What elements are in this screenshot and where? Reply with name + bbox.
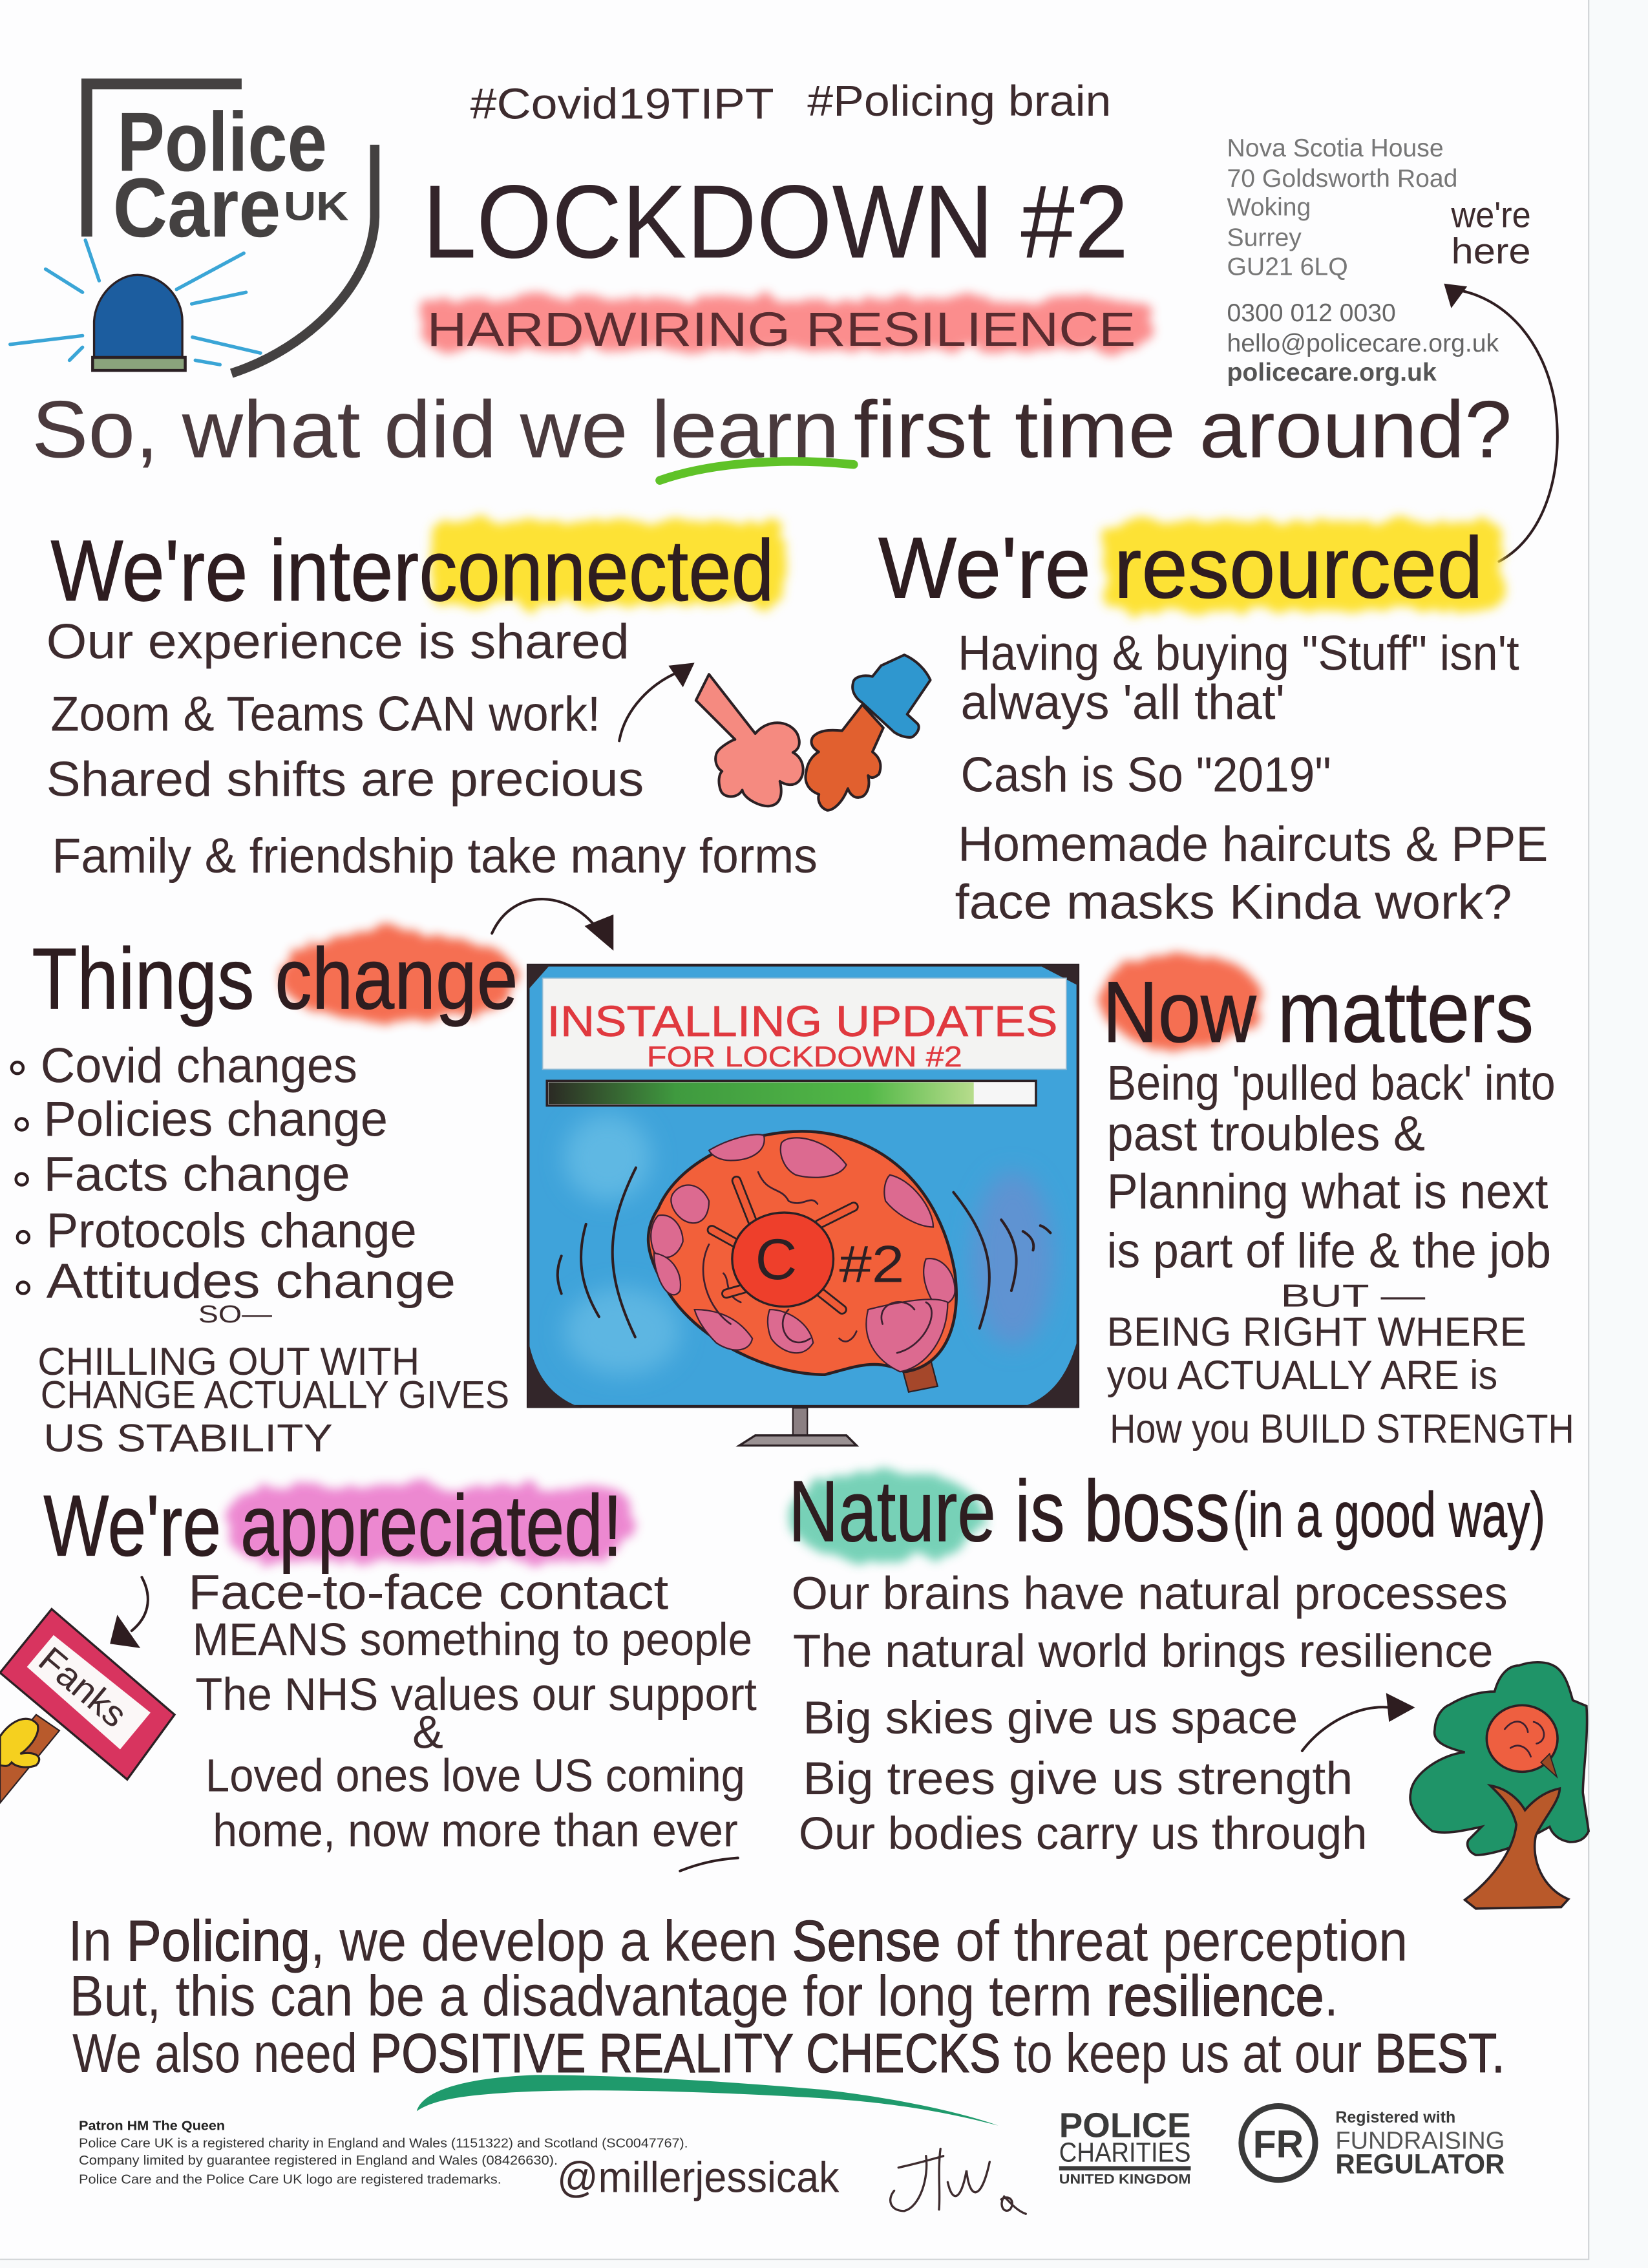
- footer legal text: [79, 2119, 688, 2187]
- panel: things change: Things change: [32, 930, 518, 1027]
- logo: Fundraising Regulator: [1241, 2106, 1505, 2180]
- callout: we're here with arrow: [1444, 194, 1558, 562]
- contact address: hello@policecare.org.uk: [1227, 330, 1499, 357]
- panel: now matters: Being 'pulled back' into: [1107, 1055, 1556, 1110]
- contact address: Woking: [1227, 194, 1311, 222]
- contact address: [1227, 134, 1499, 387]
- panel: things change: Attitudes change: [47, 1254, 456, 1309]
- monitor illustration: [528, 965, 1078, 1446]
- panel: nature is boss: [787, 1463, 1545, 1860]
- panel: now matters: past troubles &: [1107, 1107, 1425, 1161]
- panel: now matters: Now matters: [1103, 964, 1534, 1061]
- hashtags: [470, 77, 1111, 129]
- contact address: policecare.org.uk: [1227, 359, 1437, 387]
- panel: we're interconnected: [47, 521, 818, 884]
- logo: Fundraising Regulator: REGULATOR: [1335, 2149, 1505, 2180]
- logo: Fundraising Regulator: FUNDRAISING: [1335, 2128, 1505, 2155]
- hashtags: #Covid19TIPT: [470, 80, 774, 129]
- closing statement: We also need POSITIVE REALITY CHECKS to keep us at our BEST.: [72, 2023, 1505, 2084]
- panel: we're resourced: face masks Kinda work?: [955, 875, 1512, 930]
- title: LOCKDOWN #2: [423, 164, 1128, 280]
- update message panel: FOR LOCKDOWN #2: [647, 1041, 962, 1073]
- update message panel: [543, 978, 1066, 1073]
- logo: Police Charities: UNITED KINGDOM: [1059, 2171, 1191, 2187]
- panel: we're resourced: always 'all that': [961, 675, 1285, 730]
- closing statement: In Policing, we develop a keen Sense of threat perception: [68, 1908, 1408, 1973]
- contact address: Surrey: [1227, 224, 1302, 252]
- main question: [32, 384, 1512, 480]
- icon: tree with brain: [1410, 1662, 1589, 1909]
- panel: nature is boss: Our brains have natural processes: [792, 1567, 1508, 1619]
- panel: now matters: you ACTUALLY ARE is: [1107, 1353, 1497, 1398]
- panel: things change: CHANGE ACTUALLY GIVES: [41, 1372, 509, 1416]
- logo: Fundraising Regulator: Registered with: [1335, 2109, 1455, 2126]
- contact address: GU21 6LQ: [1227, 253, 1348, 281]
- logo: Fundraising Regulator: FR: [1253, 2122, 1304, 2166]
- logo: Police Care UK shield: UK: [284, 184, 349, 229]
- panel: we're interconnected: Family & friendship take many forms: [52, 829, 818, 884]
- panel: things change: CHILLING OUT WITH: [37, 1339, 419, 1383]
- panel: things change: Covid changes: [41, 1039, 357, 1094]
- signature: [891, 2149, 1026, 2214]
- progress bar: [547, 1081, 1036, 1105]
- panel: we're interconnected: We're interconnected: [50, 522, 774, 619]
- panel: now matters: How you BUILD STRENGTH: [1110, 1406, 1574, 1452]
- panel: now matters: is part of life & the job: [1107, 1224, 1551, 1278]
- panel: things change: [12, 929, 518, 1459]
- panel: things change: US STABILITY: [43, 1415, 333, 1459]
- logo: Police Charities: CHARITIES: [1059, 2137, 1191, 2168]
- panel: things change: Protocols change: [47, 1203, 417, 1258]
- logo: Police Care UK shield: Care: [113, 160, 280, 255]
- panel: we're appreciated: Face-to-face contact: [188, 1565, 668, 1620]
- brain with virus: [648, 1131, 956, 1392]
- footer legal text: Company limited by guarantee registered in England and Wales (08426630).: [79, 2154, 558, 2168]
- closing statement: [68, 1908, 1505, 2126]
- panel: we're appreciated: MEANS something to people: [193, 1614, 752, 1666]
- panel: we're appreciated: Loved ones love US coming: [206, 1750, 745, 1802]
- panel: we're appreciated: home, now more than ever: [213, 1805, 738, 1857]
- monitor screen: [528, 965, 1078, 1408]
- logo: Police Care UK shield: Police: [117, 94, 327, 189]
- panel: we're appreciated: [43, 1478, 757, 1871]
- logo: Police Charities: POLICE: [1059, 2106, 1191, 2145]
- panel: we're appreciated: We're appreciated!: [43, 1478, 622, 1574]
- panel: we're resourced: [878, 520, 1548, 930]
- author handle: @millerjessicak: [557, 2154, 840, 2202]
- panel: we're appreciated: &: [412, 1706, 443, 1758]
- main question: first time around?: [854, 384, 1512, 474]
- contact address: 70 Goldsworth Road: [1227, 165, 1457, 193]
- panel: now matters: BEING RIGHT WHERE: [1107, 1309, 1527, 1355]
- contact address: 0300 012 0030: [1227, 299, 1396, 327]
- panel: we're resourced: We're resourced: [878, 520, 1483, 617]
- hashtags: #Policing brain: [807, 77, 1111, 125]
- panel: now matters: Planning what is next: [1107, 1164, 1548, 1219]
- panel: we're appreciated: The NHS values our support: [195, 1669, 757, 1721]
- panel: now matters: BUT —: [1280, 1278, 1426, 1314]
- callout: we're here with arrow: here: [1451, 230, 1531, 271]
- panel: nature is boss: Our bodies carry us through: [799, 1808, 1368, 1860]
- panel: we're resourced: Homemade haircuts & PPE: [958, 817, 1548, 872]
- arrow to tree: [1302, 1693, 1415, 1751]
- monitor stand: [739, 1408, 856, 1446]
- closing statement: But, this can be a disadvantage for long term resilience.: [69, 1964, 1338, 2028]
- panel: nature is boss: Nature is boss: [788, 1463, 1230, 1560]
- arrow to hands: [619, 662, 695, 741]
- vibration lines: [558, 1168, 1050, 1337]
- subtitle with red highlight: HARDWIRING RESILIENCE: [427, 302, 1136, 356]
- icon: Fanks sign with hand: [0, 1577, 174, 1803]
- panel: we're resourced: Cash is So "2019": [961, 748, 1331, 803]
- icon: blue police siren: [10, 240, 260, 370]
- logo: Police Charities: [1059, 2106, 1191, 2187]
- logo: Police Care UK shield: [87, 84, 375, 374]
- arrow to sign: [110, 1577, 148, 1648]
- footer legal text: Police Care UK is a registered charity in England and Wales (1151322) and Scotland (SC0047767).: [79, 2136, 688, 2150]
- icon: two hands reaching: [696, 655, 931, 811]
- panel: nature is boss: Big skies give us space: [803, 1692, 1298, 1744]
- arrow to monitor: [492, 899, 613, 951]
- panel: we're interconnected: Shared shifts are precious: [47, 752, 644, 807]
- icon: Fanks sign with hand: Fanks: [31, 1638, 135, 1735]
- main question: So, what did we learn: [32, 384, 840, 474]
- brain with virus: C: [755, 1227, 797, 1291]
- panel: we're interconnected: Zoom & Teams CAN work!: [50, 687, 600, 742]
- panel: now matters: [1101, 953, 1574, 1452]
- panel: things change: Policies change: [43, 1092, 388, 1147]
- panel: things change: Facts change: [43, 1147, 350, 1202]
- contact address: Nova Scotia House: [1227, 134, 1444, 162]
- footer legal text: Patron HM The Queen: [79, 2119, 225, 2133]
- brain with virus: #2: [840, 1236, 904, 1294]
- callout: we're here with arrow: we're: [1451, 194, 1531, 235]
- panel: nature is boss: Big trees give us strength: [803, 1753, 1353, 1805]
- update message panel: INSTALLING UPDATES: [547, 997, 1058, 1046]
- panel: we're interconnected: Our experience is shared: [47, 615, 629, 670]
- footer legal text: Police Care and the Police Care UK logo are registered trademarks.: [79, 2172, 502, 2187]
- panel: nature is boss: The natural world brings resilience: [793, 1626, 1493, 1677]
- panel: we're resourced: Having & buying "Stuff" isn't: [958, 626, 1519, 681]
- panel: things change: SO—: [198, 1301, 273, 1328]
